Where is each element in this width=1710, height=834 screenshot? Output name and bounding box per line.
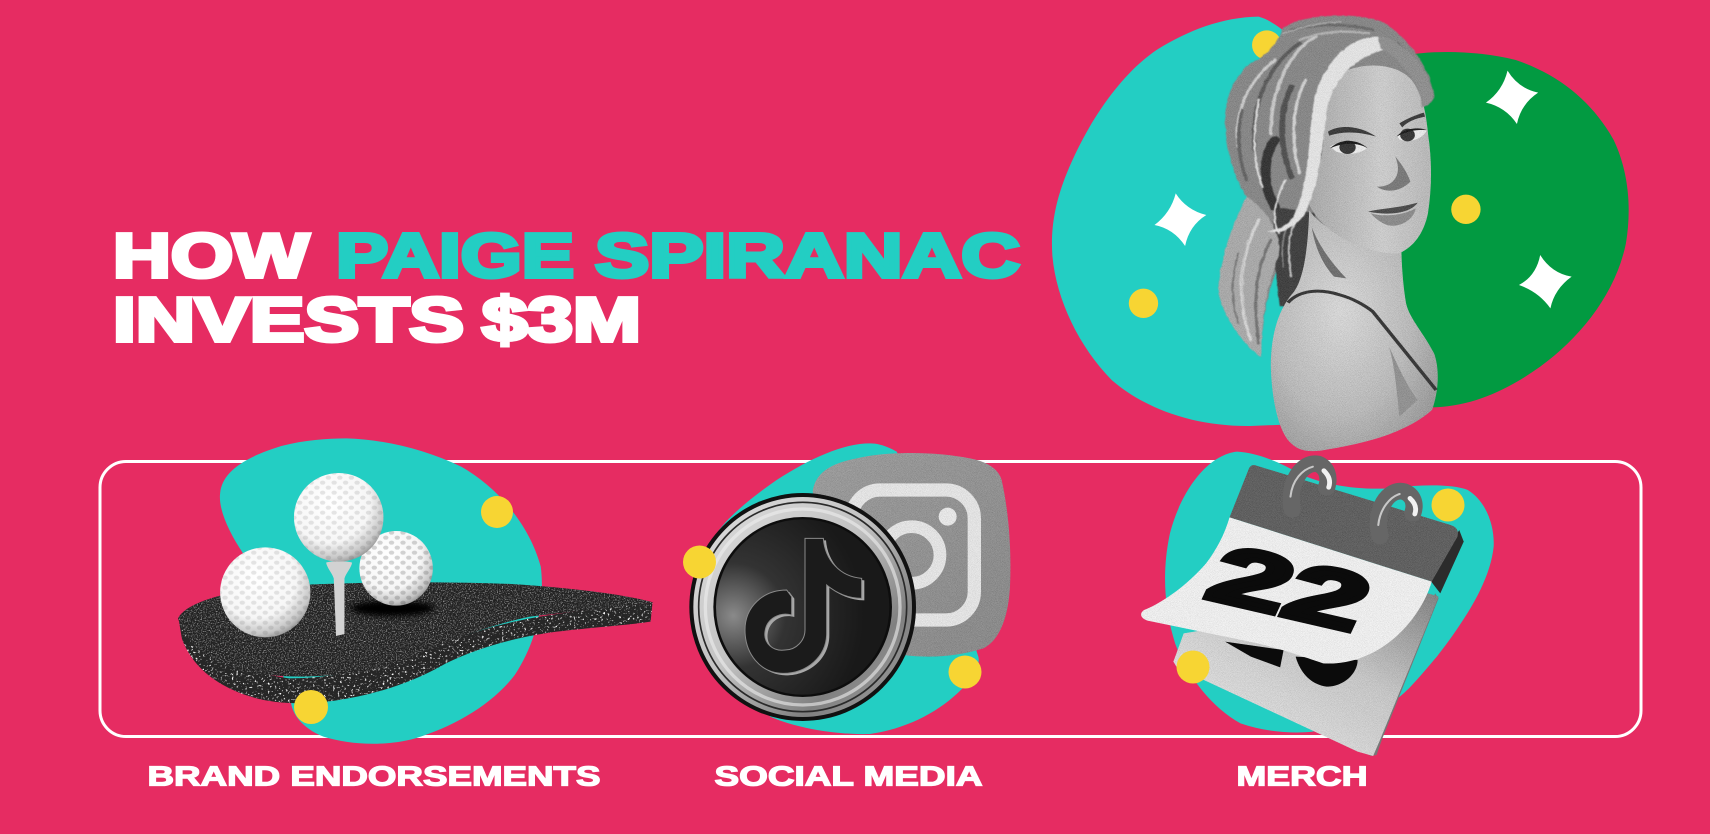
teal blob behind portrait — [1052, 17, 1340, 426]
tiktok note — [745, 538, 864, 675]
sparkle left — [1154, 193, 1206, 246]
lower date numerals — [1225, 642, 1284, 667]
golf ball top — [294, 473, 383, 562]
yellow dot — [294, 690, 328, 724]
date numerals 22: 22 — [1194, 528, 1385, 648]
tiktok coin — [689, 493, 916, 721]
golf tee — [326, 561, 352, 636]
yellow dot top — [1252, 30, 1281, 60]
label: merch: MERCH — [1236, 760, 1368, 792]
yellow dot left — [1129, 289, 1158, 318]
yellow dot — [481, 496, 513, 528]
title: HOW — [113, 222, 310, 291]
label: social media: SOCIAL MEDIA — [714, 760, 982, 792]
yellow dot — [1432, 488, 1464, 522]
yellow dot — [1176, 650, 1210, 684]
frame — [100, 462, 1641, 736]
yellow dot — [683, 546, 716, 578]
title: PAIGE — [336, 222, 574, 291]
yellow dot — [948, 656, 982, 688]
golf ball left — [220, 547, 310, 637]
green blob behind portrait — [1357, 52, 1629, 407]
portrait panel — [1052, 15, 1629, 451]
teal blob — [220, 438, 542, 744]
calendar — [1141, 464, 1464, 756]
curled page — [1141, 517, 1432, 664]
label: brand endorsements: BRAND ENDORSEMENTS — [148, 760, 600, 792]
sparkle top right — [1486, 71, 1538, 124]
panel: social media — [683, 443, 1010, 792]
calendar ring right — [1378, 491, 1416, 536]
yellow dot right — [1451, 195, 1481, 224]
turf shadow — [350, 600, 434, 616]
title: SPIRANAC — [595, 222, 1020, 291]
sparkle bottom right — [1519, 255, 1572, 308]
panel: merch — [1141, 452, 1494, 792]
turf — [178, 582, 653, 703]
calendar ring left — [1290, 464, 1330, 509]
golf ball right — [359, 531, 433, 606]
instagram icon — [813, 453, 1010, 657]
title: $3M — [482, 286, 641, 355]
title: INVESTS — [113, 286, 464, 355]
portrait of Paige Spiranac — [1219, 15, 1438, 451]
panel: brand endorsements — [148, 438, 653, 792]
title — [113, 222, 1020, 355]
teal blob — [717, 443, 979, 734]
teal blob — [1165, 452, 1494, 733]
